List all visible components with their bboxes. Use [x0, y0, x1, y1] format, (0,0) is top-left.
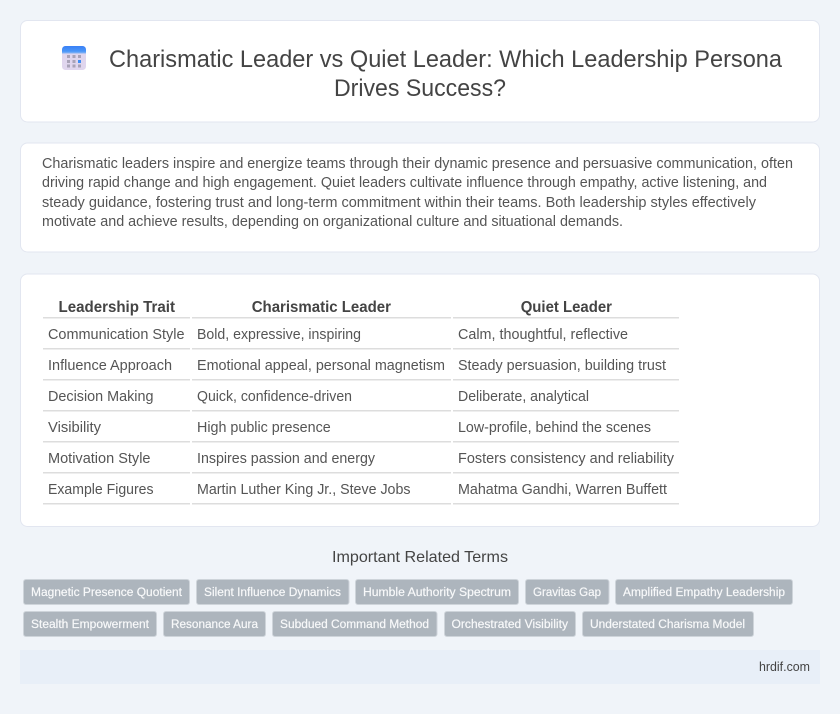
table row: decision making: Decision Making	[48, 389, 154, 405]
panel: intro paragraph	[20, 143, 820, 252]
table header row: Charismatic Leader	[252, 299, 391, 316]
title	[109, 46, 783, 102]
table row: visibility: Low-profile, behind the scenes	[458, 420, 651, 436]
table row: example figures: Martin Luther King Jr., Steve Jobs	[197, 482, 410, 498]
table row: influence approach: Emotional appeal, personal magnetism	[197, 358, 445, 374]
text block: summary	[42, 156, 793, 230]
table row: motivation style	[48, 451, 675, 467]
table header row	[58, 299, 612, 316]
table row: decision making	[48, 389, 589, 405]
table row: decision making: Deliberate, analytical	[458, 389, 589, 405]
table row: example figures: Mahatma Gandhi, Warren Buffett	[458, 482, 667, 498]
tag: Stealth Empowerment	[31, 617, 150, 631]
heading: related terms: Important Related Terms	[332, 549, 508, 566]
table row: communication style: Communication Style	[48, 327, 184, 343]
footer: hrdif.com	[759, 659, 810, 674]
tag group: related terms	[24, 580, 792, 636]
table row: visibility: Visibility	[48, 420, 102, 436]
tag: Understated Charisma Model	[590, 617, 745, 631]
table row: communication style	[48, 327, 628, 343]
text block: summary: Charismatic leaders inspire and energize teams through their dynamic presence and persuasive communication, often	[42, 156, 793, 172]
title: Charismatic Leader vs Quiet Leader: Which Leadership Persona	[109, 46, 783, 73]
title: Drives Success?	[334, 75, 506, 102]
table row: communication style: Calm, thoughtful, reflective	[458, 327, 628, 343]
text block: summary: motivate and achieve results, depending on organizational culture and situational demands.	[42, 214, 623, 230]
tag	[444, 612, 576, 636]
table row: motivation style: Fosters consistency and reliability	[458, 451, 675, 467]
icon: calendar	[62, 46, 86, 70]
table row: motivation style: Motivation Style	[48, 451, 150, 467]
tag	[582, 612, 754, 636]
tag: Humble Authority Spectrum	[363, 585, 511, 599]
text block: summary: steady guidance, fostering trust and long-term commitment within their teams. Both leadership styles effectively	[42, 195, 757, 211]
table row: communication style: Bold, expressive, inspiring	[197, 327, 361, 343]
tag	[24, 612, 156, 636]
table row: influence approach: Influence Approach	[48, 358, 172, 374]
table header row: Leadership Trait	[58, 299, 176, 316]
tag	[164, 612, 266, 636]
panel: header	[20, 20, 820, 122]
tag: Orchestrated Visibility	[452, 617, 569, 631]
table header row: Quiet Leader	[521, 299, 612, 316]
tag: Magnetic Presence Quotient	[31, 585, 183, 599]
tag: Resonance Aura	[171, 617, 258, 631]
tag	[356, 580, 518, 604]
table row: influence approach	[48, 358, 666, 374]
tag: Gravitas Gap	[533, 585, 601, 599]
tag	[616, 580, 792, 604]
tag: Subdued Command Method	[280, 617, 429, 631]
text block: summary: driving rapid change and high engagement. Quiet leaders cultivate influence through empathy, active listening, and	[42, 175, 767, 191]
table row: influence approach: Steady persuasion, building trust	[458, 358, 666, 374]
table row: decision making: Quick, confidence-driven	[197, 389, 352, 405]
table row: example figures	[48, 482, 667, 498]
tag: Silent Influence Dynamics	[204, 585, 341, 599]
table row: example figures: Example Figures	[48, 482, 154, 498]
table row: visibility	[48, 420, 651, 436]
tag	[526, 580, 609, 604]
footer	[20, 650, 820, 684]
tag	[272, 612, 437, 636]
tag: Amplified Empathy Leadership	[623, 585, 785, 599]
table row: motivation style: Inspires passion and energy	[197, 451, 376, 467]
panel: comparison table	[20, 274, 820, 526]
tag	[24, 580, 190, 604]
table row: visibility: High public presence	[197, 420, 331, 436]
tag	[196, 580, 349, 604]
